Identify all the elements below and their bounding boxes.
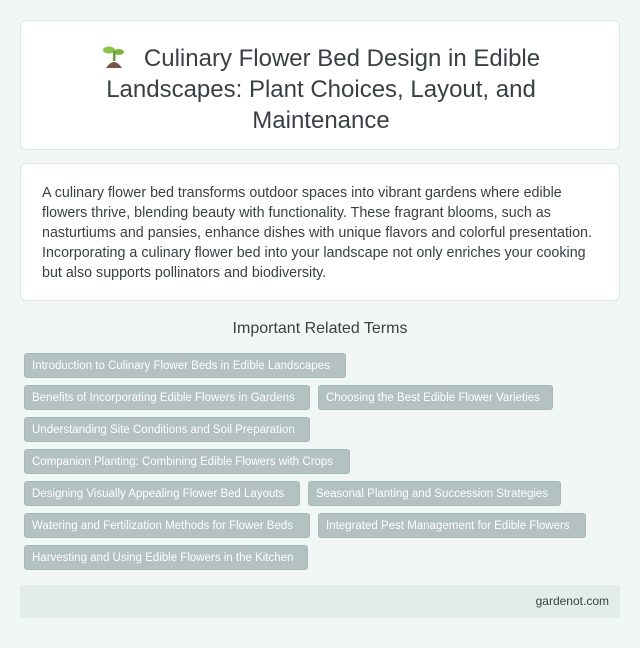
tag: Integrated Pest Management for Edible Flowers — [326, 520, 570, 532]
tag — [24, 385, 310, 410]
tag — [308, 481, 561, 506]
title card — [20, 20, 620, 150]
tag — [318, 385, 553, 410]
tag: Companion Planting: Combining Edible Flowers with Crops — [32, 456, 333, 468]
tag — [24, 417, 310, 442]
heading: related terms: Important Related Terms — [233, 320, 407, 337]
tag: Understanding Site Conditions and Soil Preparation — [32, 424, 295, 436]
tag — [24, 545, 308, 570]
icon: seedling — [103, 46, 124, 68]
footer text: gardenot.com — [536, 594, 609, 608]
description card — [20, 163, 620, 301]
tag: Designing Visually Appealing Flower Bed Layouts — [32, 488, 284, 500]
tag: Benefits of Incorporating Edible Flowers in Gardens — [32, 392, 295, 404]
tag — [24, 513, 310, 538]
tag: Choosing the Best Edible Flower Varieties — [326, 392, 540, 404]
tag — [24, 353, 346, 378]
footer — [20, 585, 620, 618]
tag — [24, 481, 300, 506]
tag — [318, 513, 586, 538]
description text: A culinary flower bed transforms outdoor spaces into vibrant gardens where edible flowers thrive, blending beauty with functionality. These fragrant blooms, such as nasturtiums and pansies, enhance dishes with unique flavors and colorful presentation. Incorporating a culinary flower bed into your landscape not only enriches your cooking but also supports pollinators and biodiversity. — [42, 185, 592, 281]
tag: Watering and Fertilization Methods for Flower Beds — [32, 520, 293, 532]
tag: Seasonal Planting and Succession Strategies — [316, 488, 548, 500]
tag: Harvesting and Using Edible Flowers in the Kitchen — [32, 552, 293, 564]
title: Culinary Flower Bed Design in Edible Landscapes: Plant Choices, Layout, and Maintenance — [106, 45, 540, 134]
tag — [24, 449, 350, 474]
tag: Introduction to Culinary Flower Beds in Edible Landscapes — [32, 360, 330, 372]
